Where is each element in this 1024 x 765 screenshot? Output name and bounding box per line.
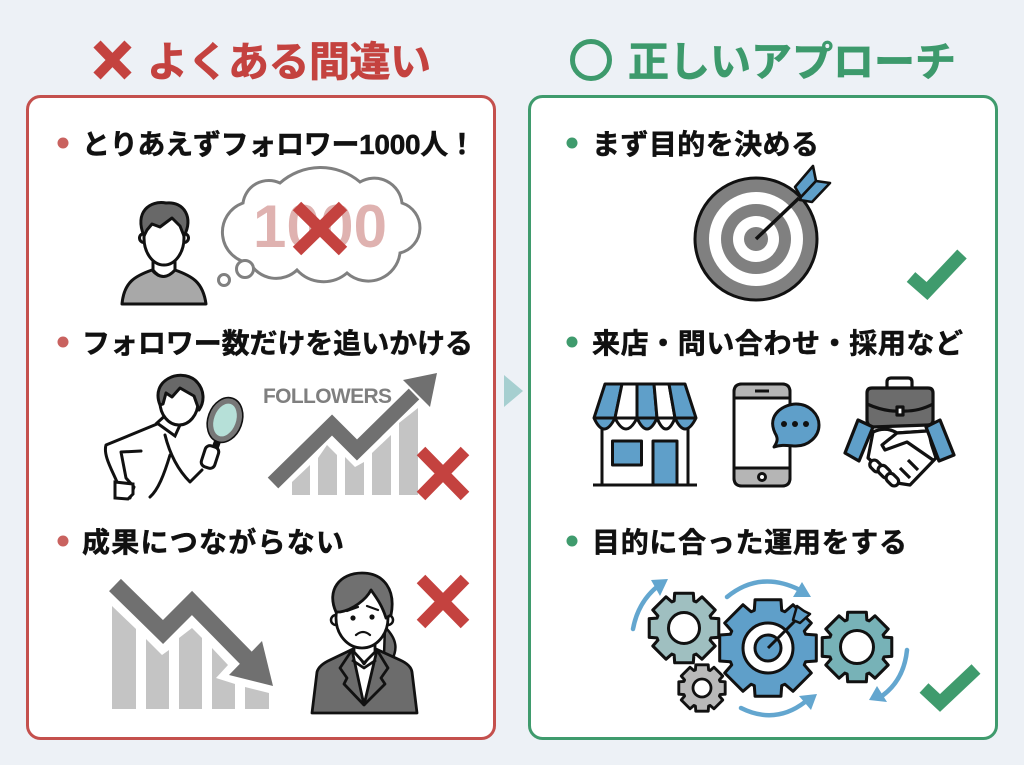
icon: shop <box>593 384 697 485</box>
icon: red cross <box>421 579 465 624</box>
icon: person thinking <box>122 203 206 304</box>
icon: gears with target and cycle arrows <box>633 579 907 715</box>
icon: target and dart <box>695 166 830 300</box>
bullet: decide the goal: まず目的を決める <box>592 129 819 160</box>
gear: small <box>679 665 725 711</box>
heading: correct approach: 正しいアプローチ <box>628 39 956 85</box>
icon: briefcase and handshake <box>845 378 954 488</box>
bullet: no results: 成果につながらない <box>82 526 344 558</box>
bullet: chasing followers: フォロワー数だけを追いかける <box>82 328 473 359</box>
bullet: follower target: とりあえずフォロワー1000人！ <box>82 129 476 160</box>
icon: red cross <box>421 451 465 496</box>
chart: rising followers: FOLLOWERS <box>263 385 392 408</box>
bullet: operate to fit the goal: 目的に合った運用をする <box>592 527 907 558</box>
panel: mistakes <box>28 96 494 738</box>
icon: green check <box>911 254 962 291</box>
icon: person with magnifier <box>105 375 249 499</box>
chart: rising followers <box>263 373 437 495</box>
gear: main with target <box>720 600 816 696</box>
heading: common mistakes: よくある間違い <box>147 39 431 85</box>
icon: thought cloud with 1000 crossed out: 1000 <box>253 193 387 260</box>
icon: phone with chat bubble <box>734 384 819 486</box>
gear: left <box>649 593 719 663</box>
chart: falling results <box>112 585 273 709</box>
gear: right <box>822 612 892 682</box>
icon: green check <box>924 669 976 703</box>
cycle arrows <box>633 581 907 715</box>
arrow between panels <box>504 375 523 407</box>
icon: worried woman <box>312 573 417 713</box>
bullet: visits, inquiries, hiring: 来店・問い合わせ・採用など <box>592 328 963 359</box>
icon: thought cloud with 1000 crossed out <box>218 168 420 286</box>
panel: correct approach <box>530 96 996 738</box>
